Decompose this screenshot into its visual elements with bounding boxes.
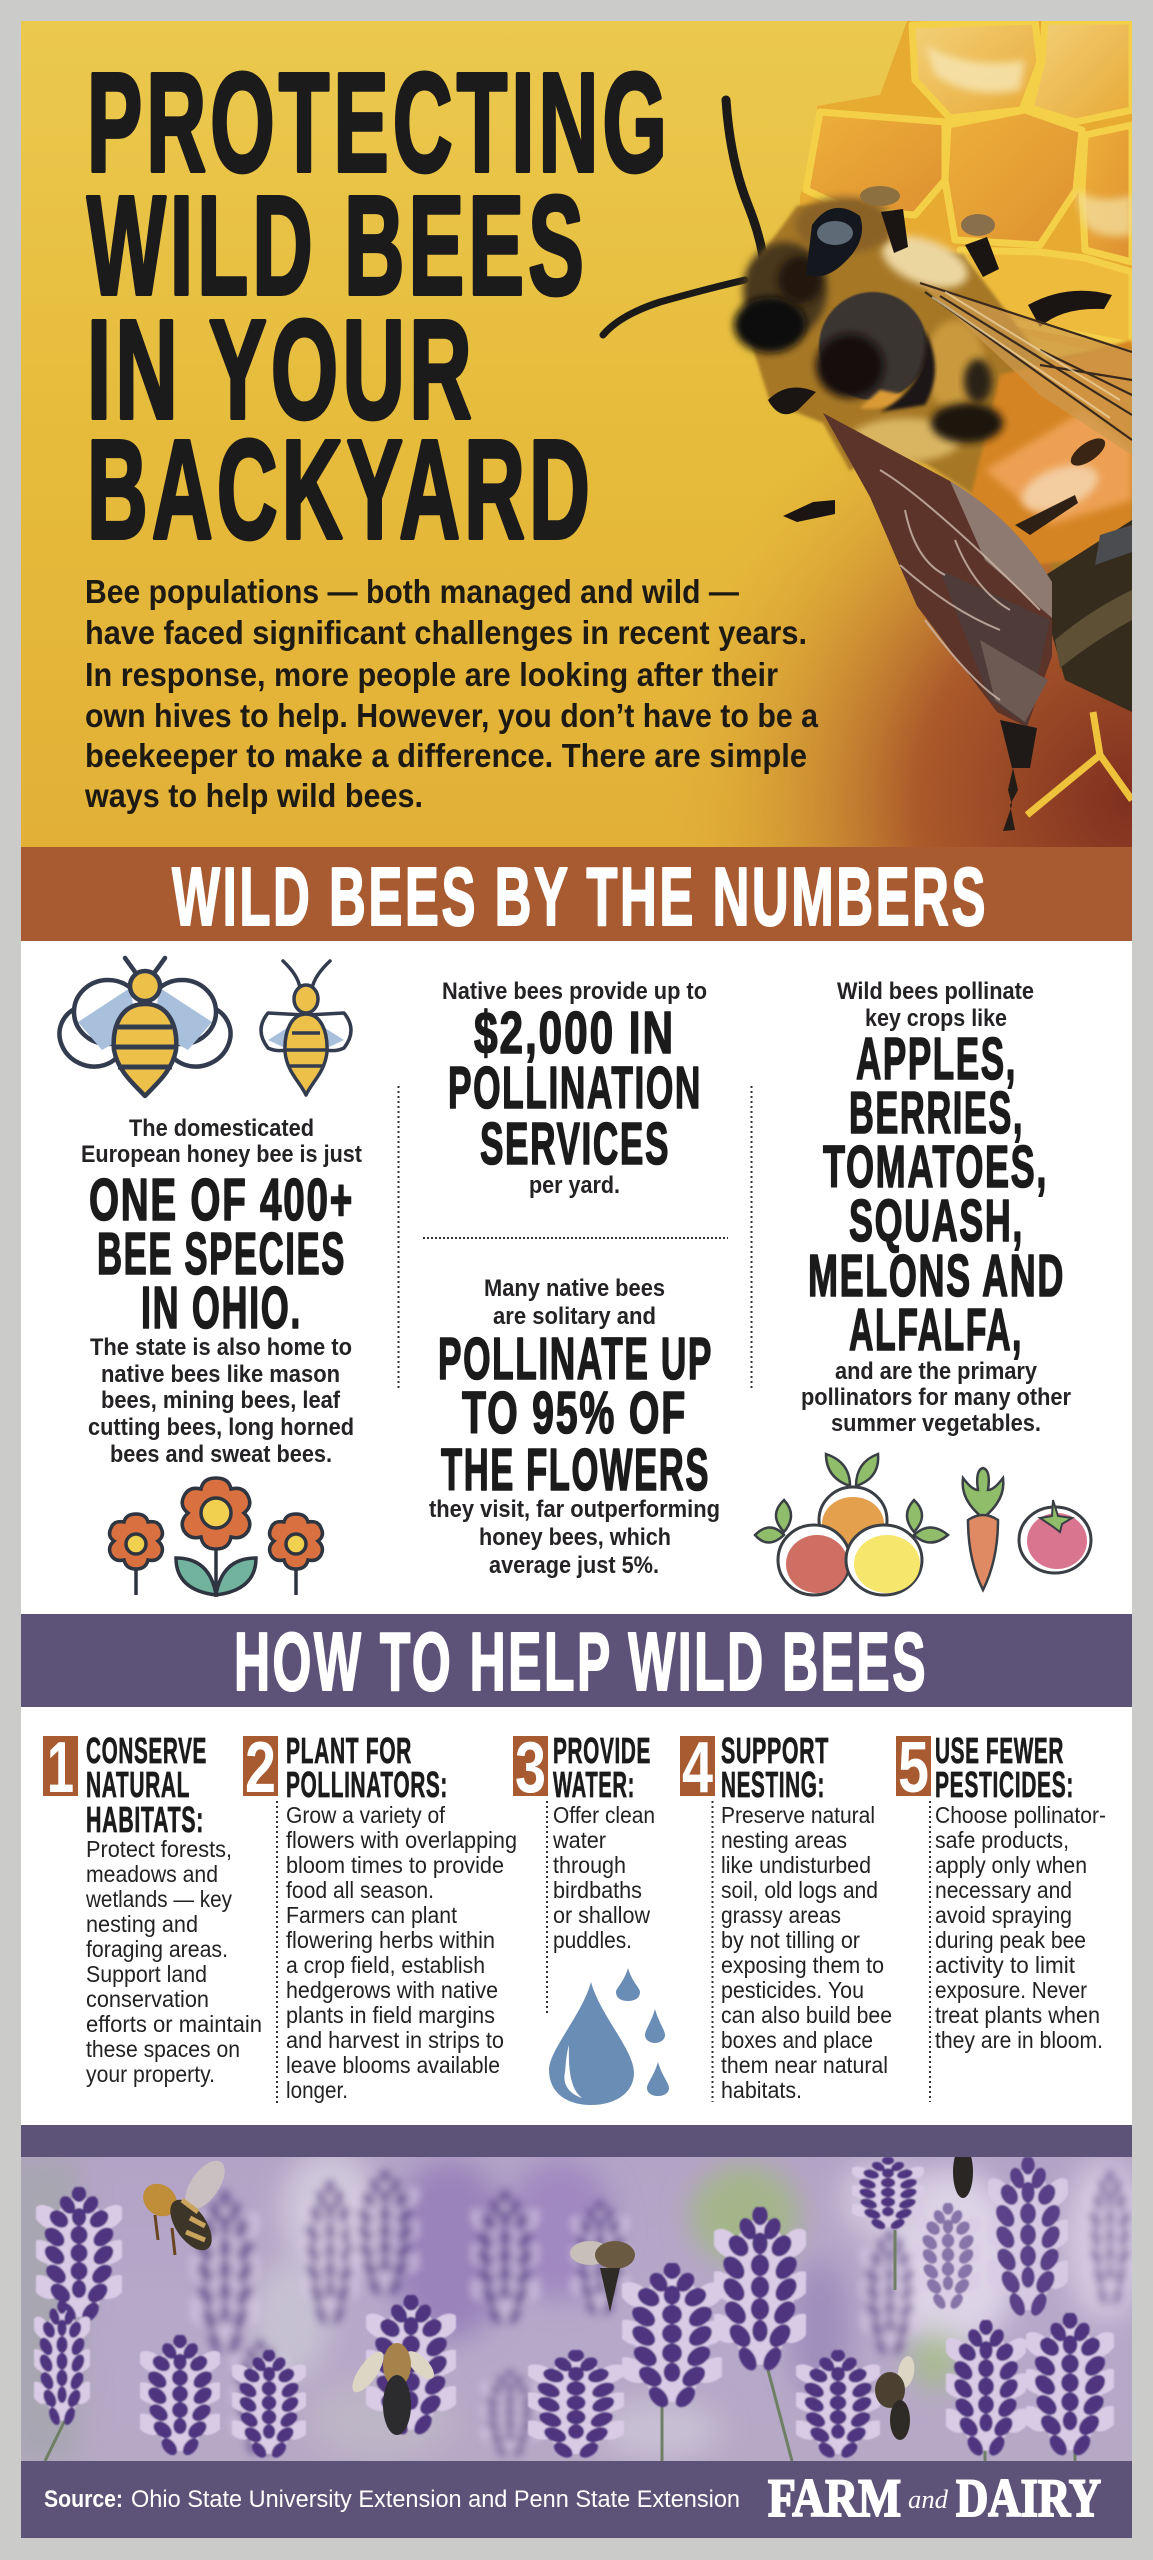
number badge 3: 3 [515,1728,546,1808]
body 1: nesting and [86,1911,198,1937]
divider: right dotted line [750,1086,752,1390]
heading 2: POLLINATORS: [286,1764,448,1805]
body 1: Support land [86,1961,207,1987]
text: pollination services: per yard. [529,1172,620,1199]
body 2: hedgerows with native [286,1977,498,2003]
text: domesticated bee [81,1115,362,1468]
dotted divider 3 [546,1801,548,2014]
text: pollinate up to 95 percent: TO 95% OF [462,1380,687,1446]
heading 1: NATURAL [86,1764,190,1805]
body 4: can also build bee [721,2002,892,2028]
bee: abdomen [970,340,1132,565]
heading 1: CONSERVE [86,1730,207,1771]
intro text [84,573,819,814]
body 4: them near natural [721,2052,888,2078]
bee: thorax [819,292,927,400]
body 1: Protect forests, [86,1836,232,1862]
antennae [603,100,764,335]
text: key crops: summer vegetables. [831,1410,1041,1437]
icon: water drops [549,1968,669,2105]
heading 1: HABITATS: [86,1799,204,1840]
flying bee [143,2160,225,2256]
text: key crops: pollinators for many other [801,1384,1071,1411]
heading 3 [553,1730,651,1805]
body 3: water [552,1827,606,1853]
step 1 [43,1728,262,2087]
text: key crops: APPLES, [856,1026,1017,1092]
text: domesticated bee: ONE OF 400+ [89,1167,354,1233]
icon: fruits [755,1454,948,1595]
body 2: Grow a variety of [286,1802,446,1828]
icon: large bee [49,958,241,1096]
body 2: leave blooms available [286,2052,500,2078]
bee: stinger [1000,720,1037,768]
body 1: efforts or maintain [86,2011,262,2037]
text: key crops: key crops like [865,1005,1007,1032]
heading 3: PROVIDE [553,1730,651,1771]
body 5: necessary and [935,1877,1072,1903]
lavender spikes [26,2156,1125,2459]
bee: body fur [752,204,1132,570]
text: pollinate up to 95 percent: average just 5%. [489,1552,659,1579]
body 3: through [553,1852,626,1878]
bee: head and eye [743,242,827,338]
text: domesticated bee: cutting bees, long horned [88,1414,354,1441]
body 5 [935,1802,1106,2053]
body 1: your property. [86,2061,215,2087]
body 5: safe products, [935,1827,1069,1853]
body 2: and harvest in strips to [286,2027,504,2053]
heading 5: USE FEWER [935,1730,1064,1771]
step 3 [513,1728,669,2105]
body 5: Choose pollinator- [935,1802,1106,1828]
heading 2 [286,1730,448,1805]
body 1: meadows and [86,1861,218,1887]
heading 5 [935,1730,1074,1805]
intro text: Bee populations — both managed and wild — [85,573,739,610]
logo: Farm and Dairy [768,2468,1101,2528]
comb bottom right [1027,712,1132,815]
text: pollination services: $2,000 IN [474,1000,675,1066]
dotted divider 4 [712,1801,714,2102]
step 5 [896,1728,1106,2053]
body 1 [85,1836,262,2087]
icon: small bee [261,961,351,1095]
logo: Farm and Dairy: FARM [768,2468,901,2528]
text: pollinate up to 95 percent: Many native bees [484,1275,665,1302]
text: domesticated bee: The domesticated [129,1115,314,1142]
heading 4 [721,1730,829,1805]
body 2: plants in field margins [286,2002,495,2028]
divider: left dotted line [398,1086,400,1390]
text: pollinate up to 95 percent [429,1275,720,1579]
dotted divider 5 [929,1801,931,2102]
body 4: by not tilling or [721,1927,860,1953]
text: pollinate up to 95 percent: THE FLOWERS [441,1437,710,1503]
body 2: flowers with overlapping [286,1827,517,1853]
body 5: apply only when [935,1852,1087,1878]
text: domesticated bee: bees and sweat bees. [110,1441,332,1468]
body 1: these spaces on [86,2036,240,2062]
body 4: exposing them to [721,1952,884,1978]
title: WILD BEES [87,166,588,324]
intro text: own hives to help. However, you don’t have to be a [85,697,819,734]
bees on lavender [137,2146,973,2440]
body 2: longer. [286,2077,348,2103]
body 3: Offer clean [553,1802,655,1828]
body 4 [721,1802,892,2103]
intro text: In response, more people are looking after their [85,656,778,693]
text: domesticated bee: The state is also home to [90,1334,352,1361]
body 4: nesting areas [721,1827,847,1853]
title: IN YOUR [87,290,476,448]
blurred lavender behind [182,2169,1141,2457]
text: domesticated bee: bees, mining bees, leaf [101,1387,341,1414]
logo: Farm and Dairy: DAIRY [956,2468,1101,2528]
title: BACKYARD [87,410,594,568]
text: pollinate up to 95 percent: honey bees, which [479,1524,671,1551]
lavender stems [45,2230,1075,2461]
number badge 2: 2 [245,1728,276,1808]
body 1: foraging areas. [86,1936,228,1962]
text: key crops [801,978,1071,1437]
body 5: during peak bee [935,1927,1086,1953]
heading 4: SUPPORT [721,1730,829,1771]
number badge 4: 4 [682,1728,713,1808]
body 2: flowering herbs within [286,1927,495,1953]
icon: tomato [1019,1500,1091,1573]
body 4: soil, old logs and [721,1877,878,1903]
text: domesticated bee: European honey bee is just [81,1141,362,1168]
heading 1 [86,1730,207,1840]
body 4: Preserve natural [721,1802,875,1828]
text: key crops: SQUASH, [849,1188,1024,1254]
text: key crops: BERRIES, [849,1080,1024,1146]
text: pollination services: SERVICES [480,1111,670,1177]
body 4: pesticides. You [721,1977,864,2003]
text: key crops: Wild bees pollinate [837,978,1034,1005]
body 2: a crop field, establish [286,1952,485,1978]
bee: legs [768,209,1112,522]
body 1: wetlands — key [85,1886,232,1912]
body 5: activity to limit [935,1952,1076,1978]
icon: flowers [110,1478,322,1595]
bee: dark patches [931,403,1003,443]
intro text: ways to help wild bees. [84,777,423,814]
column: species in Ohio [49,958,362,1595]
hero photo: honeycomb and bee [600,21,1132,847]
text: pollinate up to 95 percent: they visit, far outperforming [429,1496,720,1523]
number badge 5: 5 [898,1728,929,1808]
number badge 1: 1 [47,1728,74,1808]
body 4: like undisturbed [721,1852,871,1878]
intro text: beekeeper to make a difference. There are simple [85,737,807,774]
source credit: Ohio State University Extension and Penn State Extension [131,2486,740,2513]
text: domesticated bee: BEE SPECIES [97,1221,346,1287]
icon: carrot [963,1468,1003,1590]
body 2: Farmers can plant [286,1902,458,1928]
blurred background [10,2150,1145,2461]
bee: upper wing [920,283,1132,455]
dotted divider 2 [276,1801,278,2105]
body 2: bloom times to provide [286,1852,504,1878]
panel: numbers [21,941,1132,1614]
panel: hero [21,21,1140,850]
heading 3: WATER: [553,1764,635,1805]
divider: middle dotted line [423,1237,728,1239]
heading 2: PLANT FOR [286,1730,412,1771]
body 2: food all season. [286,1877,434,1903]
step 4 [680,1728,892,2103]
body 3: puddles. [553,1927,632,1953]
purple spacer strip [21,2125,1132,2157]
logo: Farm and Dairy: and [908,2485,949,2514]
body 4: boxes and place [721,2027,873,2053]
body 4: habitats. [721,2077,802,2103]
body 5: treat plants when [935,2002,1100,2028]
body 5: avoid spraying [935,1902,1072,1928]
body 3: birdbaths [553,1877,642,1903]
text: pollination services [442,978,707,1199]
footer bar [21,2461,1132,2538]
body 3 [552,1802,655,1953]
text: key crops: and are the primary [835,1358,1038,1385]
text: pollinate up to 95 percent: POLLINATE UP [438,1326,713,1392]
text: domesticated bee: IN OHIO. [141,1275,302,1341]
body 5: they are in bloom. [935,2027,1103,2053]
text: pollination services: Native bees provide up to [442,978,707,1005]
heading 4: NESTING: [721,1764,825,1805]
photo: lavender field with bees [10,2146,1145,2461]
hero background [21,21,1132,847]
text: pollinate up to 95 percent: are solitary and [493,1303,656,1330]
intro text: have faced significant challenges in recent years. [85,614,807,651]
body 1: conservation [86,1986,209,2012]
panel: how to help [21,1707,1132,2125]
title: PROTECTING [87,43,671,201]
title [87,43,671,568]
body 5: exposure. Never [935,1977,1087,2003]
column: key crops [755,978,1091,1595]
step 2 [243,1728,517,2103]
honeycomb [800,21,1132,268]
body 4: grassy areas [721,1902,841,1928]
text: pollination services: POLLINATION [448,1055,702,1121]
text: domesticated bee: native bees like mason [101,1361,340,1388]
text: key crops: ALFALFA, [849,1297,1023,1363]
source credit: Source: [44,2486,123,2513]
bee: lower wing [823,413,1052,727]
body 3: or shallow [553,1902,650,1928]
body 2 [286,1802,517,2103]
